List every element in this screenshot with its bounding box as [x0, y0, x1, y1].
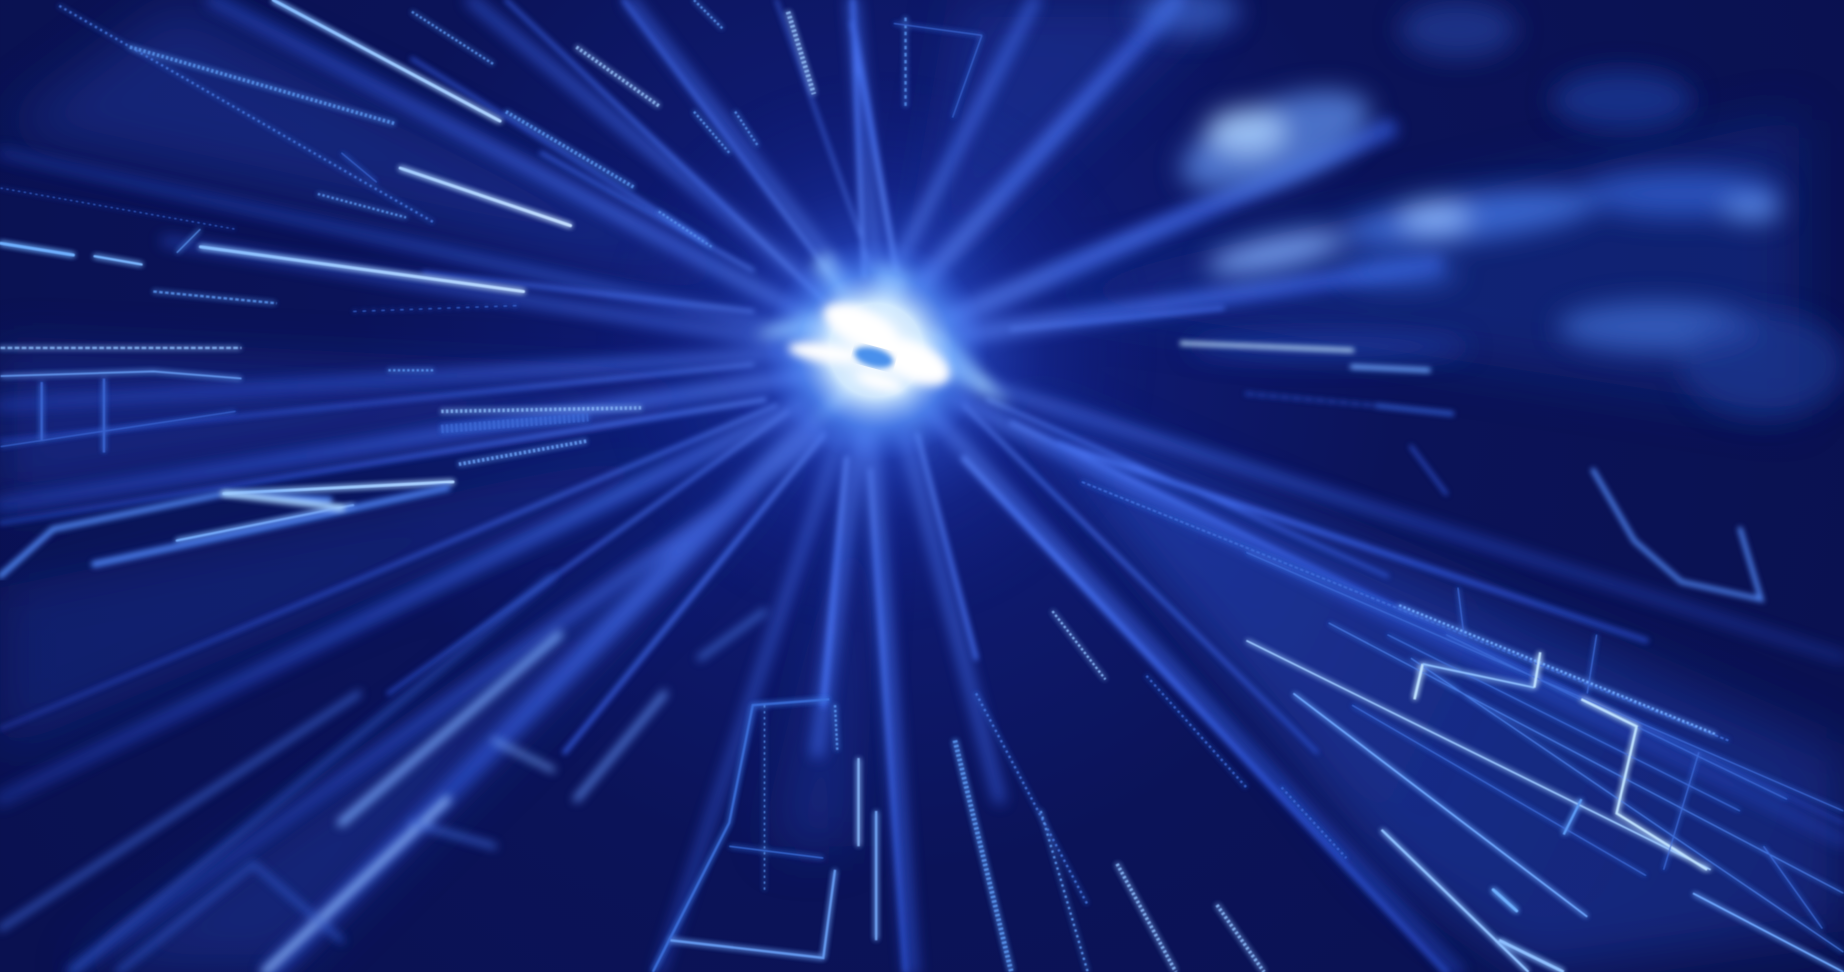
bright white streaks [1, 0, 1517, 911]
circuit traces lower right [1082, 482, 1843, 972]
central halo [594, 71, 1158, 635]
circuit traces upper left [1, 0, 982, 464]
circuit block lower centre [653, 611, 1346, 972]
blurred circuit shapes right [1182, 343, 1761, 599]
blurred trace band left [1, 488, 447, 576]
circuit traces lower left, blurred [1, 576, 765, 972]
central starburst core [753, 239, 1011, 464]
blurred clouds upper right [1135, 0, 1844, 417]
dark eye in core [852, 343, 896, 372]
